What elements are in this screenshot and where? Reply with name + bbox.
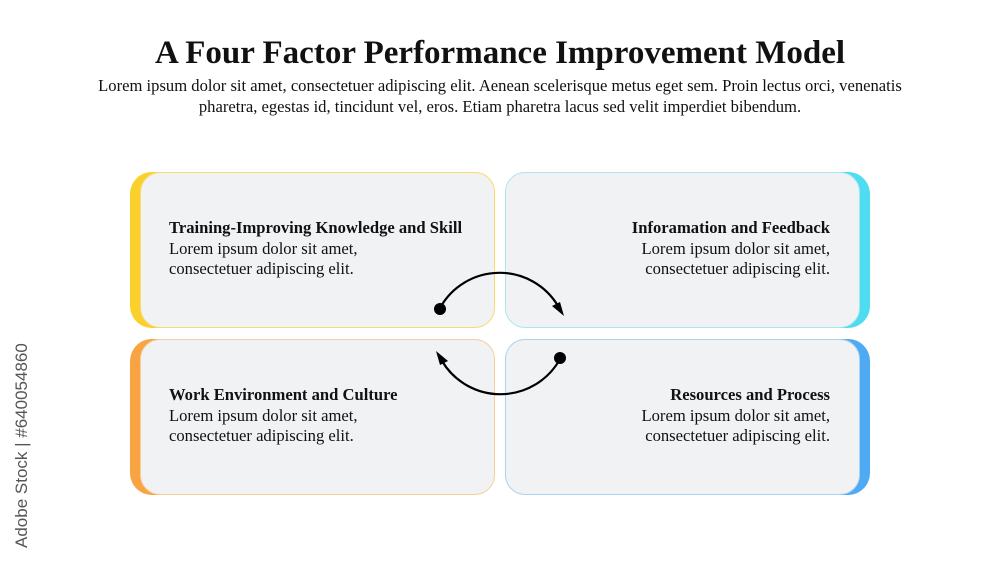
text: information: Inforamation and Feedback [632, 218, 830, 237]
text: resources [642, 385, 830, 445]
text: information: Lorem ipsum dolor sit amet, [642, 238, 830, 258]
text: work environment: consectetuer adipiscing elit. [169, 426, 354, 445]
text: work environment: Lorem ipsum dolor sit amet, [169, 406, 358, 424]
panel: resources [505, 339, 870, 495]
panel: training [130, 172, 495, 328]
panel: information [505, 172, 870, 328]
subtitle: Lorem ipsum dolor sit amet, consectetuer adipiscing elit. Aenean scelerisque metus eget sem. Proin lectus orci, venenatis pharetra, egestas id, tincidunt vel, eros. Etiam pharetra lacus sed velit imperdiet bibendum. [98, 76, 902, 116]
text: training [169, 218, 462, 278]
watermark: Adobe Stock | #640054860 [12, 343, 31, 548]
text: work environment: Work Environment and Culture [169, 385, 398, 404]
text: training: Training-Improving Knowledge and Skill [169, 218, 462, 237]
text: resources: Lorem ipsum dolor sit amet, [642, 406, 830, 424]
text: resources: Resources and Process [670, 385, 830, 404]
text: training: Lorem ipsum dolor sit amet, [169, 238, 358, 258]
panel: work environment [130, 339, 495, 495]
title: A Four Factor Performance Improvement Model [155, 35, 845, 71]
text: information: consectetuer adipiscing elit. [645, 259, 830, 278]
text: work environment [169, 385, 398, 445]
text: information [632, 218, 830, 278]
text: training: consectetuer adipiscing elit. [169, 259, 354, 278]
text: resources: consectetuer adipiscing elit. [645, 426, 830, 445]
